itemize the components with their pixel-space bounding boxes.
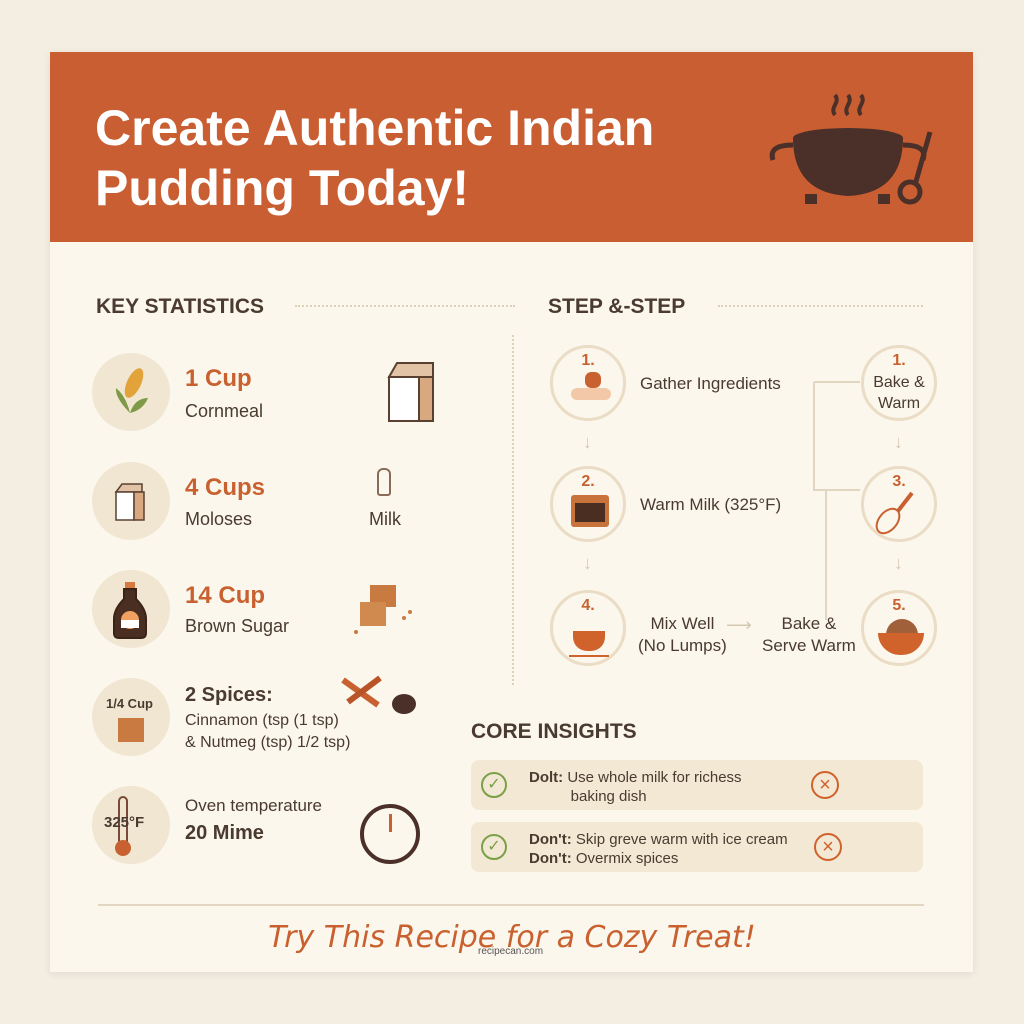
arrow: ↓ bbox=[583, 553, 592, 573]
step 4: Mix Well bbox=[650, 614, 714, 633]
insight 2 bbox=[471, 822, 923, 872]
step 4: 4. bbox=[581, 597, 595, 614]
stat: spices bbox=[92, 676, 416, 756]
insight 1: × bbox=[819, 774, 831, 796]
header banner bbox=[50, 52, 973, 242]
stat: oven temperature: 20 Mime bbox=[185, 822, 264, 844]
icon: pot bbox=[770, 94, 932, 204]
step 1 right: Bake & bbox=[873, 374, 925, 391]
stat: spices: Cinnamon (tsp (1 tsp) bbox=[185, 712, 339, 729]
heading: key statistics: KEY STATISTICS bbox=[96, 295, 264, 318]
stat: oven temperature: 325°F bbox=[104, 814, 144, 831]
stat: spices: & Nutmeg (tsp) 1/2 tsp) bbox=[185, 734, 350, 751]
step 4: ⟶ bbox=[726, 615, 752, 635]
heading: core insights: CORE INSIGHTS bbox=[471, 720, 637, 743]
title bbox=[95, 100, 654, 216]
stat: molasses: 4 Cups bbox=[185, 474, 265, 501]
stat: oven temperature bbox=[92, 786, 420, 864]
stat: molasses bbox=[92, 462, 401, 540]
step 4: Serve Warm bbox=[762, 636, 856, 655]
stat: oven temperature: Oven temperature bbox=[185, 796, 322, 815]
step 3: 3. bbox=[892, 473, 906, 490]
step 3 bbox=[861, 466, 937, 542]
step 1 bbox=[550, 345, 781, 421]
arrow: ↓ bbox=[894, 553, 903, 573]
arrow: ↓ bbox=[583, 432, 592, 452]
step 4: (No Lumps) bbox=[638, 636, 727, 655]
title: Pudding Today! bbox=[95, 160, 469, 216]
insight 2: ✓ bbox=[487, 838, 501, 855]
step 1 right bbox=[861, 345, 937, 421]
stat: cornmeal bbox=[92, 353, 263, 431]
arrow: ↓ bbox=[894, 432, 903, 452]
stat: molasses: Moloses bbox=[185, 509, 252, 529]
watermark: recipecan.com bbox=[478, 946, 543, 957]
heading: step by step: STEP &-STEP bbox=[548, 295, 685, 318]
step 1 right: Warm bbox=[878, 395, 920, 412]
stat: brown sugar: Brown Sugar bbox=[185, 616, 289, 636]
insight 1 bbox=[471, 760, 923, 810]
title: Create Authentic Indian bbox=[95, 100, 654, 156]
step 2: Warm Milk (325°F) bbox=[640, 495, 781, 514]
step 1: 1. bbox=[581, 352, 595, 369]
stat: brown sugar: 14 Cup bbox=[185, 582, 265, 609]
step 5: 5. bbox=[892, 597, 906, 614]
stat: spices: 2 Spices: bbox=[185, 684, 273, 706]
insight 1: baking dish bbox=[571, 788, 647, 805]
insight 2: Don't: Overmix spices bbox=[529, 850, 678, 867]
step 4: Bake & bbox=[782, 614, 836, 633]
step 1: Gather Ingredients bbox=[640, 374, 781, 393]
icon: milk carton bbox=[387, 362, 434, 422]
step 1 right: 1. bbox=[892, 352, 906, 369]
footer tagline: Try This Recipe for a Cozy Treat! bbox=[268, 920, 756, 955]
step 4 bbox=[550, 590, 856, 666]
insight 1: Dolt: Use whole milk for richess bbox=[529, 769, 742, 786]
step 5 bbox=[861, 590, 937, 666]
stat: brown sugar bbox=[92, 570, 412, 648]
step 2: 2. bbox=[581, 473, 595, 490]
step 2 bbox=[550, 466, 781, 542]
stat: molasses: Milk bbox=[369, 509, 401, 529]
insight 2: × bbox=[822, 836, 834, 858]
insight 1: ✓ bbox=[487, 776, 501, 793]
stat: cornmeal: 1 Cup bbox=[185, 365, 252, 392]
stat: cornmeal: Cornmeal bbox=[185, 401, 263, 421]
connector lines bbox=[813, 381, 860, 620]
insight 2: Don't: Skip greve warm with ice cream bbox=[529, 831, 788, 848]
stat: spices: 1/4 Cup bbox=[106, 696, 153, 711]
